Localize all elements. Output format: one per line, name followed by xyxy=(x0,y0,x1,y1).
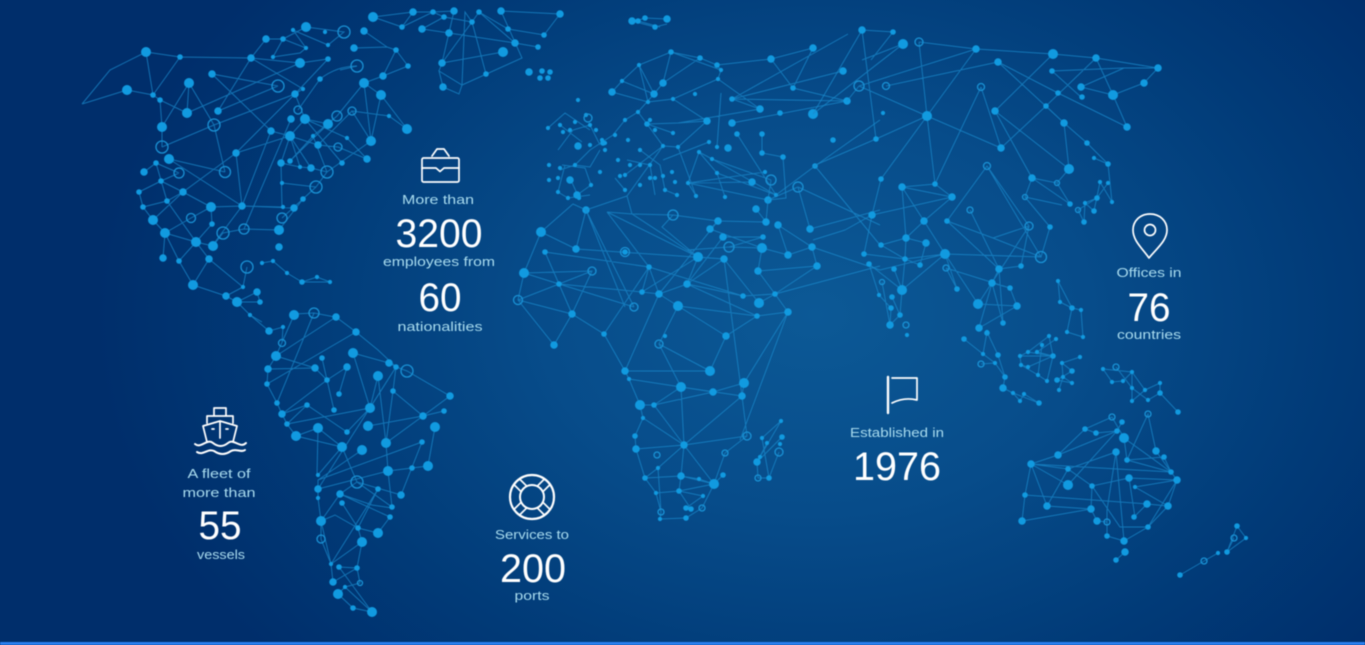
stat: employees and nationalities xyxy=(383,149,495,334)
label: a fleet of: A fleet of xyxy=(188,466,251,481)
region: southeast asia islands xyxy=(964,281,1178,412)
icon: ship xyxy=(195,408,246,454)
label: vessels: vessels xyxy=(197,547,246,562)
icon: location pin xyxy=(1133,214,1167,258)
region: asia xyxy=(813,30,1158,335)
region: australia and new zealand xyxy=(1022,411,1246,575)
icon: briefcase xyxy=(422,149,459,182)
label: nationalities: nationalities xyxy=(398,319,483,334)
number: 76: 76 xyxy=(1128,286,1170,330)
number: 60: 60 xyxy=(418,276,462,320)
number: 55: 55 xyxy=(198,504,242,548)
stat: port services xyxy=(495,475,569,603)
label: countries: countries xyxy=(1117,327,1182,342)
stat: year established xyxy=(850,377,944,489)
region: south america xyxy=(250,308,450,612)
number: 3200: 3200 xyxy=(396,212,482,256)
region: greenland and arctic islands xyxy=(340,11,667,95)
label: services to: Services to xyxy=(495,527,569,542)
label: more than: more than xyxy=(182,485,256,500)
region: europe xyxy=(548,34,848,249)
number: 200: 200 xyxy=(500,547,566,591)
region: africa xyxy=(514,120,880,519)
label: offices in: Offices in xyxy=(1116,265,1182,280)
label: more than: More than xyxy=(402,192,474,207)
icon: flag xyxy=(888,377,917,413)
label: ports: ports xyxy=(514,588,550,603)
stat: fleet of vessels xyxy=(182,408,256,562)
bottom accent bar xyxy=(0,642,1365,645)
label: employees from: employees from xyxy=(383,254,495,269)
icon: lifebuoy xyxy=(510,475,554,519)
label: established in: Established in xyxy=(850,425,944,440)
stat: offices and countries xyxy=(1116,214,1182,342)
region: north america xyxy=(82,26,407,322)
number: 1976: 1976 xyxy=(853,445,941,489)
